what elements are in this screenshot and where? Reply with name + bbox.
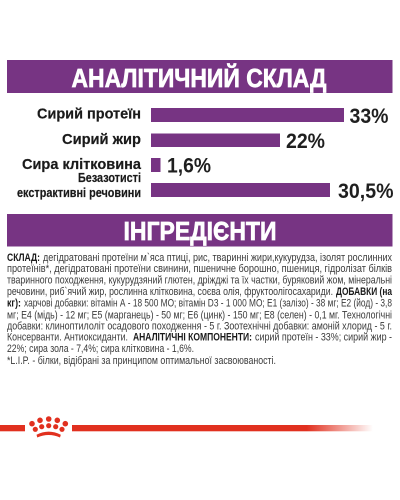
text block: ingredients list: 22%; сира зола - 7,4%; сира клітковина - 1,6%. — [7, 343, 194, 355]
row: nitrogen-free extractives — [17, 170, 394, 203]
panel: ingredients heading — [7, 214, 392, 246]
row: crude fibre: Сира клітковина — [22, 156, 142, 173]
text block: ingredients list: Консерванти. Антиоксиданти. — [7, 332, 128, 344]
row: crude fat: Сирий жир — [62, 131, 141, 148]
text block: ingredients list: АНАЛІТИЧНІ КОМПОНЕНТИ: — [133, 332, 252, 344]
row: nitrogen-free extractives: 30,5% — [338, 180, 394, 203]
text block: ingredients list: кг): — [7, 298, 21, 310]
panel: analytical composition heading — [7, 60, 392, 93]
row: crude fibre — [22, 154, 211, 178]
row: crude fat — [62, 130, 325, 153]
row: crude fibre: 1,6% — [167, 154, 211, 178]
text block: ingredients list — [7, 252, 393, 367]
icon: royal canin crown — [29, 416, 68, 438]
footer: red rule with crown — [0, 416, 373, 438]
bar chart: analytical composition — [17, 105, 394, 203]
row: crude protein: Сирий протеїн — [37, 106, 141, 122]
text block: ingredients list: СКЛАД: — [7, 252, 40, 264]
text block: ingredients list: *L.I.P. - білки, відібрані за принципом оптимальної засвоюваності. — [7, 355, 276, 367]
row: crude protein — [37, 105, 389, 128]
row: crude fat: 22% — [286, 130, 325, 153]
panel: analytical composition heading: АНАЛІТИЧНИЙ СКЛАД — [72, 63, 327, 93]
panel: ingredients heading: ІНГРЕДІЄНТИ — [124, 216, 276, 246]
row: nitrogen-free extractives: Безазотисті — [78, 170, 141, 185]
row: nitrogen-free extractives: екстрактивні речовини — [17, 185, 141, 200]
row: crude protein: 33% — [350, 105, 389, 128]
